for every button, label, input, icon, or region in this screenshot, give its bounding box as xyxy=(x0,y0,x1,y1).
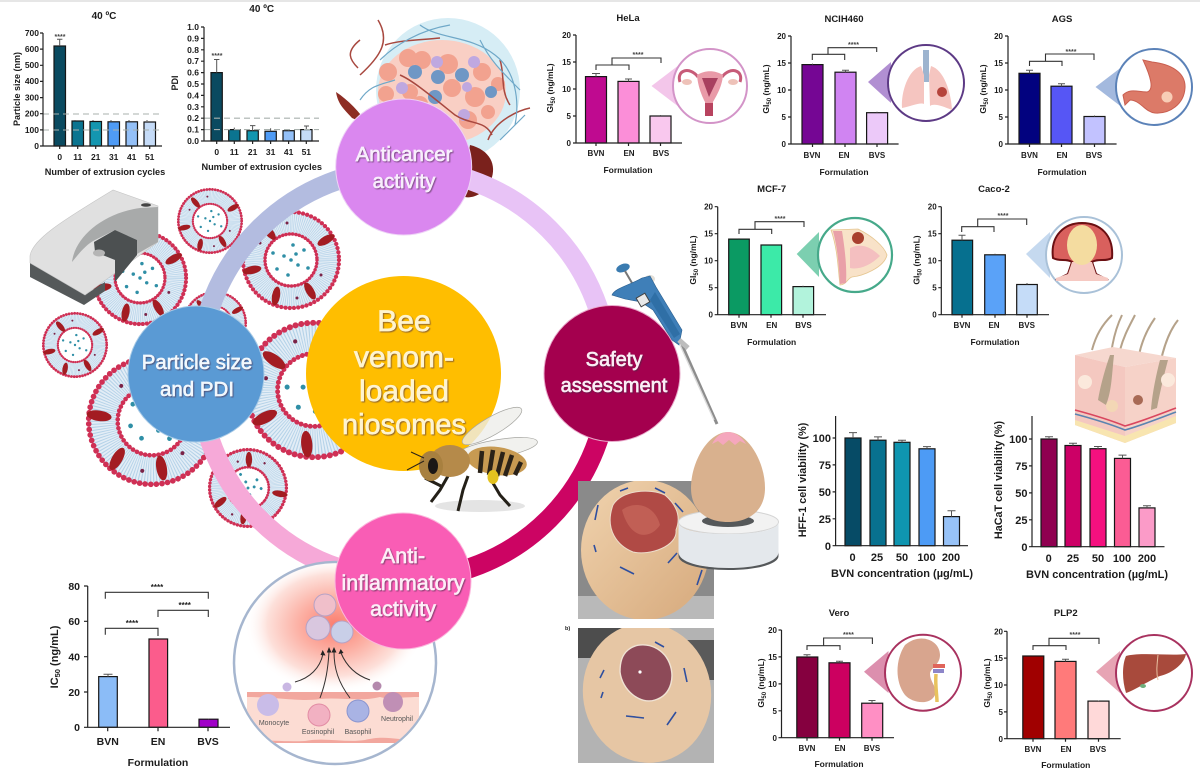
chart: Caco-2 GI50 xyxy=(912,184,1049,347)
chart: MCF-7 GI50: 15 xyxy=(704,230,714,239)
chart: HeLa GI50: 15 xyxy=(562,58,572,67)
chart: NCIH460 GI50: (ng/mL) xyxy=(761,64,771,98)
chart: PLP2 GI50: **** xyxy=(1070,632,1081,639)
illustration: inflammation cell recruitment: Basophil xyxy=(345,729,372,736)
icon: particle size analyser instrument xyxy=(30,190,158,305)
chart: HFF-1 cell viability: 50 xyxy=(819,487,831,499)
chart: PLP2 GI50: BVS xyxy=(1090,745,1107,754)
bubble: anti-inflammatory activity xyxy=(335,513,471,649)
chart: particle size vs extrusion cycles: 200 xyxy=(25,108,39,118)
chart: particle size vs extrusion cycles: 700 xyxy=(25,28,39,38)
chart: Vero GI50: **** xyxy=(843,632,854,639)
chart: NCIH460 GI50: 5 xyxy=(782,113,787,122)
chart: particle size vs extrusion cycles: 21 xyxy=(91,152,101,162)
chart: HeLa GI50 xyxy=(545,13,682,175)
chart: Vero GI50: (ng/mL) xyxy=(756,658,766,692)
chart: NCIH460 GI50: Formulation xyxy=(819,167,869,177)
chart: MCF-7 GI50: **** xyxy=(775,216,786,223)
bubble: anti-inflammatory activity: Anti- xyxy=(381,544,425,568)
illustration: inflammation cell recruitment: Eosinophil xyxy=(302,729,335,736)
chart: IC50 anti-inflammatory: IC xyxy=(49,677,61,688)
chart: Vero GI50 xyxy=(756,608,894,769)
chart: IC50 anti-inflammatory: 60 xyxy=(68,616,80,628)
chart: particle size vs extrusion cycles: 40 ºC xyxy=(92,11,116,22)
bubble: anti-inflammatory activity: inflammatory xyxy=(341,571,465,595)
chart: MCF-7 GI50: 50 xyxy=(694,268,700,276)
photo: chick chorioallantoic membrane, treated egg b xyxy=(578,628,714,763)
chart: HaCaT cell viability xyxy=(993,416,1168,581)
chart: Caco-2 GI50: 15 xyxy=(928,230,937,239)
chart: particle size vs extrusion cycles: 0 xyxy=(57,152,62,162)
chart: PDI vs extrusion cycles: 0 xyxy=(214,147,219,157)
chart: Caco-2 GI50: 5 xyxy=(932,284,937,293)
bubble: particle size and PDI: and PDI xyxy=(160,378,234,401)
chart: IC50 anti-inflammatory: **** xyxy=(178,601,192,610)
chart: MCF-7 GI50: Formulation xyxy=(747,337,796,347)
chart: Caco-2 GI50: BVS xyxy=(1018,321,1036,330)
chart: particle size vs extrusion cycles: 300 xyxy=(25,92,39,102)
chart: HaCaT cell viability: 25 xyxy=(1015,515,1028,527)
central ring connector xyxy=(199,169,609,579)
chart: PLP2 GI50 xyxy=(982,608,1121,770)
chart: Vero GI50: GI xyxy=(756,699,766,708)
chart: MCF-7 GI50: 0 xyxy=(709,311,714,320)
chart: NCIH460 GI50: EN xyxy=(838,151,850,160)
chart: particle size vs extrusion cycles: Number of extrusion cycles xyxy=(45,167,165,177)
icon: skin cross-section xyxy=(1075,315,1178,443)
chart: PDI vs extrusion cycles: Number of extrusion cycles xyxy=(201,162,322,172)
chart: PLP2 GI50: GI xyxy=(982,699,992,708)
chart: PDI vs extrusion cycles: 0.4 xyxy=(187,90,199,100)
chart: PLP2 GI50: Formulation xyxy=(1041,760,1090,770)
illustration: egg on stand with injection xyxy=(678,432,778,570)
chart: Vero GI50: BVN xyxy=(799,744,816,753)
chart: Vero GI50: BVS xyxy=(864,744,881,753)
chart: HaCaT cell viability: 200 xyxy=(1138,553,1156,565)
chart: HFF-1 cell viability: BVN concentration (µg/mL) xyxy=(831,568,973,580)
chart: IC50 anti-inflammatory: 0 xyxy=(74,722,80,734)
chart: IC50 anti-inflammatory: **** xyxy=(126,619,139,628)
chart: NCIH460 GI50: 20 xyxy=(777,32,787,41)
chart: particle size vs extrusion cycles: 100 xyxy=(25,125,39,135)
chart: HaCaT cell viability: BVN concentration (µg/mL) xyxy=(1026,569,1168,581)
chart: Caco-2 GI50: EN xyxy=(988,321,1000,330)
chart: Vero GI50: 10 xyxy=(768,680,778,689)
chart: MCF-7 GI50: BVS xyxy=(795,321,812,330)
chart: Vero GI50: 20 xyxy=(768,626,778,635)
chart: IC50 anti-inflammatory: 20 xyxy=(68,687,80,699)
illustration: inflammation cell recruitment: Neutrophil xyxy=(381,716,413,723)
chart: IC50 anti-inflammatory: 80 xyxy=(68,581,80,593)
chart: particle size vs extrusion cycles: 51 xyxy=(145,152,155,162)
icon: uterus callout xyxy=(652,49,747,123)
chart: HeLa GI50: EN xyxy=(623,149,635,158)
bubble: particle size and PDI: Particle size xyxy=(142,351,252,374)
niosome vesicles cluster xyxy=(43,189,396,542)
chart: HaCaT cell viability: 50 xyxy=(1015,488,1028,500)
icon: stomach callout xyxy=(1096,49,1192,125)
chart: PDI vs extrusion cycles: 0.1 xyxy=(187,124,199,134)
chart: particle size vs extrusion cycles: 600 xyxy=(25,44,39,54)
chart: particle size vs extrusion cycles: 0 xyxy=(34,141,39,151)
chart: PDI vs extrusion cycles: 0.8 xyxy=(187,45,199,55)
chart: IC50 anti-inflammatory: Formulation xyxy=(128,757,188,769)
chart: HFF-1 cell viability: 100 xyxy=(917,552,936,564)
icon: pipette xyxy=(612,262,717,424)
chart: PLP2 GI50: 50 xyxy=(988,691,994,699)
chart: PDI vs extrusion cycles: 0.9 xyxy=(187,34,199,44)
central circle: title xyxy=(306,276,501,471)
chart: PLP2 GI50: EN xyxy=(1060,745,1072,754)
chart: Caco-2 GI50: Formulation xyxy=(970,337,1020,347)
chart: HaCaT cell viability: 75 xyxy=(1015,461,1028,473)
chart: Caco-2 GI50: 20 xyxy=(928,203,937,212)
chart: AGS GI50: Formulation xyxy=(1037,167,1087,177)
chart: HFF-1 cell viability: 0 xyxy=(825,541,831,553)
chart: HaCaT cell viability: 25 xyxy=(1067,553,1079,565)
bubble: particle size and PDI xyxy=(128,306,264,442)
chart: HeLa GI50: 0 xyxy=(567,139,572,148)
chart: Caco-2 GI50: 0 xyxy=(932,311,937,320)
chart: PLP2 GI50: 5 xyxy=(999,708,1004,717)
illustration: inflammation cell recruitment xyxy=(234,557,436,764)
chart: particle size vs extrusion cycles: 41 xyxy=(127,152,137,162)
chart: HaCaT cell viability: 100 xyxy=(1113,553,1131,565)
chart: HaCaT cell viability: 0 xyxy=(1021,542,1028,554)
central circle: title: loaded xyxy=(359,375,449,408)
chart: AGS GI50: BVN xyxy=(1021,151,1038,160)
chart: PDI vs extrusion cycles: 21 xyxy=(248,147,258,157)
chart: PDI vs extrusion cycles: 11 xyxy=(230,147,239,157)
chart: PDI vs extrusion cycles: 51 xyxy=(302,147,311,157)
chart: NCIH460 GI50: GI xyxy=(761,105,771,114)
icon: kidney callout xyxy=(864,635,961,711)
chart: PLP2 GI50: PLP2 xyxy=(1054,608,1078,619)
chart: HFF-1 cell viability: 50 xyxy=(896,552,908,564)
chart: HaCaT cell viability: 0 xyxy=(1046,553,1052,565)
bubble: safety assessment: assessment xyxy=(561,375,668,397)
chart: PDI vs extrusion cycles: 0.6 xyxy=(187,68,199,78)
chart: MCF-7 GI50: GI xyxy=(688,276,698,285)
chart: IC50 anti-inflammatory: BVS xyxy=(197,736,219,748)
chart: HaCaT cell viability: HaCaT cell viability (%) xyxy=(993,420,1005,539)
chart: IC50 anti-inflammatory: 40 xyxy=(68,652,80,664)
photo: chick chorioallantoic membrane, treated egg a xyxy=(578,480,714,620)
bubble: anti-inflammatory activity: activity xyxy=(370,597,436,621)
chart: PLP2 GI50: 15 xyxy=(994,654,1004,663)
chart: MCF-7 GI50: (ng/mL) xyxy=(688,235,698,269)
chart: NCIH460 GI50 xyxy=(761,14,899,177)
chart: MCF-7 GI50: EN xyxy=(766,321,777,330)
chart: HeLa GI50: **** xyxy=(633,52,644,59)
icon: liver callout xyxy=(1096,635,1192,711)
chart: AGS GI50: BVS xyxy=(1086,151,1103,160)
chart: HeLa GI50: 10 xyxy=(562,85,572,94)
chart: AGS GI50: 0 xyxy=(999,140,1004,149)
chart: PDI vs extrusion cycles: 40 ºC xyxy=(249,4,274,15)
chart: AGS GI50: EN xyxy=(1056,151,1068,160)
chart: MCF-7 GI50: 10 xyxy=(704,257,714,266)
chart: HeLa GI50: (ng/mL) xyxy=(545,63,555,97)
chart: Caco-2 GI50: GI xyxy=(912,276,922,285)
bubble: anticancer activity: Anticancer xyxy=(356,143,453,166)
chart: MCF-7 GI50: 20 xyxy=(704,203,714,212)
illustration: inflammation cell recruitment: Monocyte xyxy=(259,720,289,727)
chart: particle size vs extrusion cycles xyxy=(12,11,165,177)
chart: NCIH460 GI50: 15 xyxy=(777,59,787,68)
chart: Vero GI50: Formulation xyxy=(814,759,864,769)
chart: AGS GI50 xyxy=(978,14,1117,177)
chart: PDI vs extrusion cycles: PDI xyxy=(170,75,180,91)
chart: Caco-2 GI50: Caco-2 xyxy=(978,184,1010,195)
central circle: title: venom- xyxy=(354,341,454,374)
icon: honey bee xyxy=(407,401,539,512)
chart: NCIH460 GI50: NCIH460 xyxy=(824,14,864,25)
chart: PLP2 GI50: 10 xyxy=(994,681,1004,690)
chart: HFF-1 cell viability xyxy=(797,416,973,580)
chart: Caco-2 GI50: **** xyxy=(998,213,1009,220)
central circle: title: Bee xyxy=(377,305,431,338)
chart: PDI vs extrusion cycles: 0.5 xyxy=(187,79,199,89)
chart: Caco-2 GI50: 50 xyxy=(918,268,924,276)
chart: PDI vs extrusion cycles: 0.7 xyxy=(187,56,199,66)
chart: Caco-2 GI50: (ng/mL) xyxy=(912,235,922,269)
chart: IC50 anti-inflammatory: (ng/mL) xyxy=(49,625,61,669)
chart: NCIH460 GI50: BVN xyxy=(804,151,821,160)
chart: PDI vs extrusion cycles: 41 xyxy=(284,147,294,157)
chart: IC50 anti-inflammatory: 50 xyxy=(53,669,62,677)
chart: AGS GI50: 50 xyxy=(984,97,990,105)
bubble: anticancer activity: activity xyxy=(373,170,436,193)
chart: PDI vs extrusion cycles: 31 xyxy=(266,147,276,157)
chart: MCF-7 GI50: MCF-7 xyxy=(757,184,786,195)
illustration: tumour microenvironment xyxy=(336,18,530,197)
chart: HeLa GI50: BVN xyxy=(588,149,605,158)
chart: HFF-1 cell viability: 100 xyxy=(813,433,831,445)
chart: HeLa GI50: HeLa xyxy=(616,13,640,24)
chart: PDI vs extrusion cycles: 0.0 xyxy=(187,136,199,146)
chart: Vero GI50: EN xyxy=(834,744,846,753)
chart: AGS GI50: 10 xyxy=(994,86,1004,95)
chart: IC50 anti-inflammatory: BVN xyxy=(97,736,119,748)
chart: AGS GI50: GI xyxy=(978,105,988,114)
chart: HFF-1 cell viability: 200 xyxy=(942,552,960,564)
chart: NCIH460 GI50: BVS xyxy=(869,151,886,160)
chart: Vero GI50: 0 xyxy=(773,734,778,743)
icon: lungs callout xyxy=(868,45,964,121)
chart: PDI vs extrusion cycles xyxy=(170,4,322,172)
chart: AGS GI50: 5 xyxy=(999,113,1004,122)
chart: PDI vs extrusion cycles: 0.3 xyxy=(187,102,199,112)
chart: HeLa GI50: 5 xyxy=(567,112,572,121)
chart: PLP2 GI50: (ng/mL) xyxy=(982,658,992,692)
chart: PDI vs extrusion cycles: 0.2 xyxy=(187,113,199,123)
chart: HeLa GI50: GI xyxy=(545,104,555,113)
chart: AGS GI50: **** xyxy=(1066,49,1077,56)
chart: IC50 anti-inflammatory: **** xyxy=(151,583,164,592)
chart: Caco-2 GI50: 10 xyxy=(928,257,937,266)
chart: HeLa GI50: BVS xyxy=(653,149,670,158)
chart: IC50 anti-inflammatory: EN xyxy=(151,736,165,748)
chart: MCF-7 GI50: BVN xyxy=(731,321,748,330)
icon: colon tumour callout xyxy=(1026,217,1122,293)
chart: particle size vs extrusion cycles: 11 xyxy=(73,152,82,162)
chart: Vero GI50: 15 xyxy=(768,653,778,662)
bubble: safety assessment xyxy=(544,306,680,442)
chart: particle size vs extrusion cycles: 31 xyxy=(109,152,119,162)
chart: HeLa GI50: Formulation xyxy=(603,165,653,175)
chart: HFF-1 cell viability: 25 xyxy=(871,552,883,564)
chart: PLP2 GI50: 20 xyxy=(994,627,1004,636)
chart: NCIH460 GI50: 50 xyxy=(767,97,773,105)
icon: breast callout xyxy=(797,218,892,292)
chart: Caco-2 GI50: BVN xyxy=(954,321,971,330)
chart: MCF-7 GI50: 5 xyxy=(709,284,714,293)
chart: particle size vs extrusion cycles: **** xyxy=(55,34,66,41)
chart: IC50 anti-inflammatory xyxy=(49,581,230,769)
chart: NCIH460 GI50: **** xyxy=(848,42,859,49)
chart: AGS GI50: 20 xyxy=(994,32,1004,41)
chart: NCIH460 GI50: 10 xyxy=(777,86,787,95)
bubble: safety assessment: Safety xyxy=(586,349,642,371)
chart: AGS GI50: AGS xyxy=(1052,14,1072,25)
chart: HaCaT cell viability: 100 xyxy=(1009,434,1028,446)
chart: HFF-1 cell viability: 75 xyxy=(819,460,831,472)
chart: PDI vs extrusion cycles: 1.0 xyxy=(187,22,199,32)
chart: PLP2 GI50: BVN xyxy=(1025,745,1042,754)
chart: particle size vs extrusion cycles: 400 xyxy=(25,76,39,86)
text: panel marker b: b) xyxy=(565,626,570,632)
chart: MCF-7 GI50 xyxy=(688,184,826,347)
chart: particle size vs extrusion cycles: 500 xyxy=(25,60,39,70)
chart: PLP2 GI50: 0 xyxy=(999,735,1004,744)
central circle: title: niosomes xyxy=(342,409,466,441)
chart: HFF-1 cell viability: 25 xyxy=(819,514,831,526)
chart: Vero GI50: 50 xyxy=(762,691,768,699)
chart: HeLa GI50: 20 xyxy=(562,31,572,40)
chart: HeLa GI50: 50 xyxy=(551,96,557,104)
chart: NCIH460 GI50: 0 xyxy=(782,140,787,149)
chart: HFF-1 cell viability: HFF-1 cell viability (%) xyxy=(797,422,809,537)
chart: particle size vs extrusion cycles: Particle size (nm) xyxy=(12,52,22,126)
chart: HaCaT cell viability: 50 xyxy=(1092,553,1104,565)
chart: Vero GI50: 5 xyxy=(773,707,778,716)
chart: Vero GI50: Vero xyxy=(829,608,849,619)
chart: HFF-1 cell viability: 0 xyxy=(850,552,856,564)
chart: PDI vs extrusion cycles: **** xyxy=(212,53,223,60)
chart: AGS GI50: (ng/mL) xyxy=(978,64,988,98)
bubble: anticancer activity xyxy=(336,99,472,235)
chart: AGS GI50: 15 xyxy=(994,59,1004,68)
